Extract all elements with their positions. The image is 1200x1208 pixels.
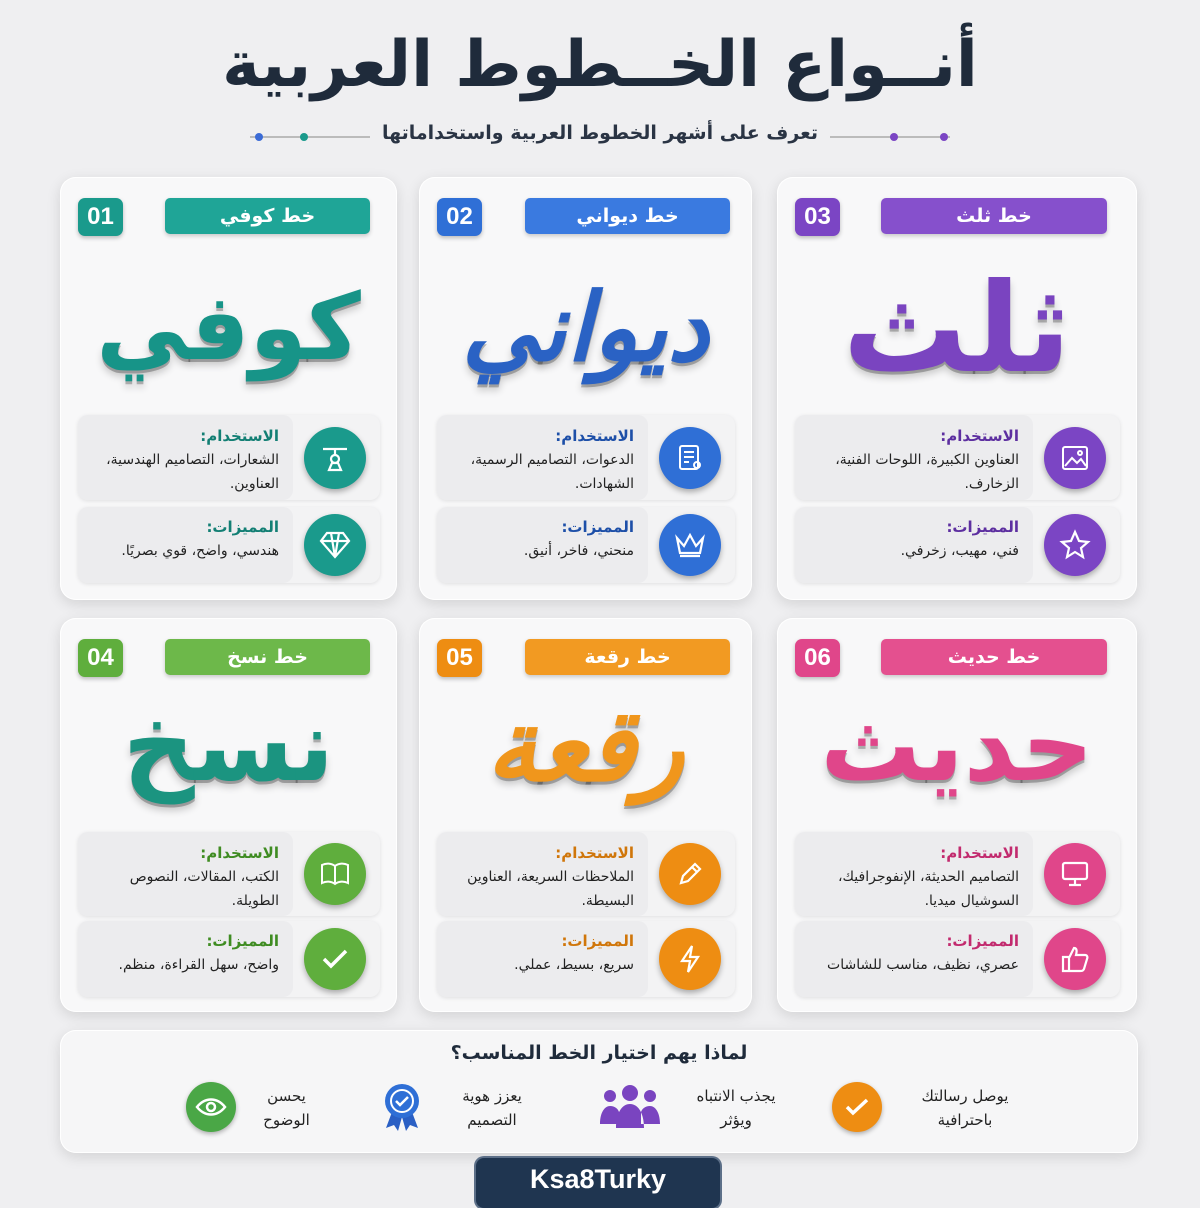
- item: professional: يوصل رسالتك: [922, 1087, 1008, 1105]
- panel: ruqaa: خط رقعة: [584, 646, 671, 668]
- panel: ruqaa: [419, 618, 752, 1012]
- item: identity: [385, 1084, 522, 1131]
- info usage: الاستخدام:: [200, 844, 279, 862]
- panel: kufi: [60, 177, 397, 600]
- panel: kufi: 01: [87, 203, 114, 230]
- info usage: التصاميم الحديثة، الإنفوجرافيك، السوشيال ميديا.: [838, 869, 1019, 909]
- info features: [78, 921, 380, 997]
- info features: المميزات:: [206, 518, 279, 536]
- info usage: [78, 415, 380, 500]
- panel: naskh: [60, 618, 397, 1012]
- info features: المميزات:: [206, 932, 279, 950]
- footer badge: [476, 1158, 720, 1208]
- info usage: الملاحظات السريعة، العناوين البسيطة.: [467, 869, 634, 909]
- info features: [795, 921, 1120, 997]
- info features: عصري، نظيف، مناسب للشاشات: [827, 957, 1019, 973]
- panel: thuluth: 03: [804, 203, 831, 230]
- word diwani: ديواني: [462, 274, 709, 383]
- panel: thuluth: خط ثلث: [956, 205, 1032, 227]
- info usage: الاستخدام:: [200, 427, 279, 445]
- panel: naskh: 04: [87, 644, 114, 671]
- info features: [78, 507, 380, 583]
- item: identity: يعزز هوية: [462, 1087, 522, 1105]
- info features: سريع، بسيط، عملي.: [514, 957, 634, 973]
- panel: naskh: خط نسخ: [227, 646, 308, 668]
- info features: المميزات:: [946, 518, 1019, 536]
- info features: [437, 921, 735, 997]
- info features: المميزات:: [561, 932, 634, 950]
- item: clarity: الوضوح: [263, 1111, 310, 1129]
- item: professional: باحترافية: [938, 1111, 992, 1129]
- panel: modern: خط حديث: [948, 646, 1040, 668]
- info features: المميزات:: [561, 518, 634, 536]
- info usage: [437, 415, 735, 500]
- info usage: الاستخدام:: [555, 844, 634, 862]
- info usage: [795, 832, 1120, 916]
- title: أنــواع الخــطوط العربية: [222, 28, 978, 102]
- footer badge: Ksa8Turky: [530, 1164, 666, 1194]
- info usage: [437, 832, 735, 916]
- panel: diwani: خط ديواني: [576, 205, 679, 227]
- bottom heading: لماذا يهم اختيار الخط المناسب؟: [451, 1042, 747, 1064]
- panel: ruqaa: 05: [446, 644, 473, 671]
- info features: واضح، سهل القراءة، منظم.: [118, 957, 279, 973]
- item: attention: يجذب الانتباه: [696, 1087, 776, 1105]
- item: clarity: يحسن: [267, 1087, 306, 1105]
- info features: [437, 507, 735, 583]
- item: identity: التصميم: [467, 1111, 517, 1129]
- info usage: [78, 832, 380, 916]
- word ruqaa: رقعة: [487, 687, 684, 804]
- info usage: الاستخدام:: [940, 844, 1019, 862]
- word kufi: كوفي: [96, 274, 361, 381]
- panel: kufi: خط كوفي: [220, 205, 315, 227]
- info features: منحني، فاخر، أنيق.: [524, 543, 634, 559]
- panel: modern: [777, 618, 1137, 1012]
- info features: المميزات:: [946, 932, 1019, 950]
- subtitle: [250, 120, 950, 144]
- info usage: [795, 415, 1120, 500]
- panel: why it matters: [60, 1030, 1138, 1153]
- item: clarity: [184, 1082, 310, 1136]
- word naskh: نسخ: [123, 687, 334, 804]
- info usage: الشعارات، التصاميم الهندسية، العناوين.: [106, 452, 279, 492]
- item: attention: ويؤثر: [720, 1111, 752, 1129]
- word thuluth: ثلث: [843, 257, 1071, 401]
- info features: [795, 507, 1120, 583]
- word modern: حديث: [820, 687, 1094, 804]
- item: professional: [830, 1082, 1008, 1136]
- item: attention: [600, 1085, 776, 1129]
- info usage: الاستخدام:: [555, 427, 634, 445]
- info features: فني، مهيب، زخرفي.: [901, 543, 1019, 559]
- subtitle: تعرف على أشهر الخطوط العربية واستخداماتها: [382, 122, 818, 144]
- panel: thuluth: [777, 177, 1137, 600]
- info usage: العناوين الكبيرة، اللوحات الفنية، الزخارف.: [835, 452, 1019, 492]
- info usage: الاستخدام:: [940, 427, 1019, 445]
- panel: modern: 06: [804, 644, 831, 671]
- info usage: الكتب، المقالات، النصوص الطويلة.: [130, 869, 279, 909]
- panel: diwani: 02: [446, 203, 473, 230]
- info features: هندسي، واضح، قوي بصريًا.: [121, 543, 279, 559]
- panel: diwani: [419, 177, 752, 600]
- info usage: الدعوات، التصاميم الرسمية، الشهادات.: [471, 452, 634, 492]
